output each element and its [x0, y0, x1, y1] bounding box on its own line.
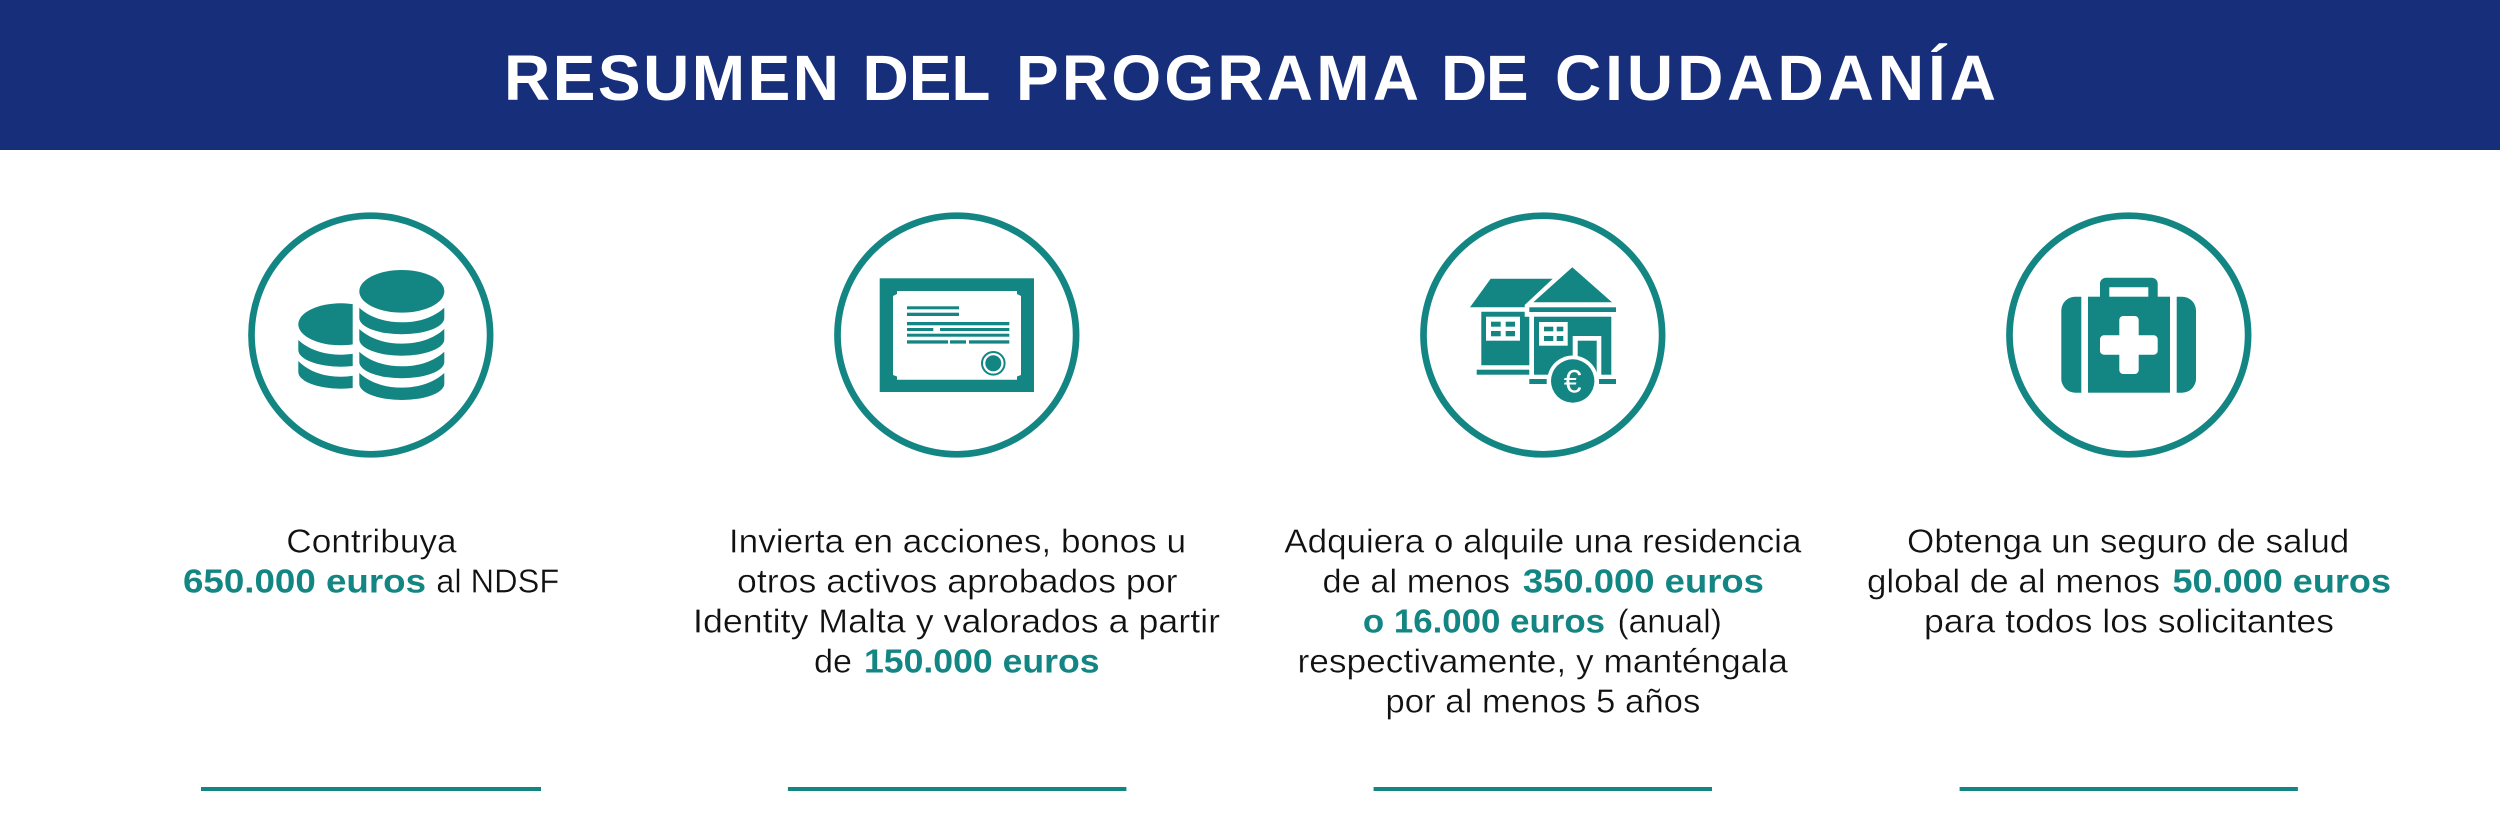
text: health insurance: global de al menos	[1867, 562, 2160, 599]
text: contribution	[183, 522, 559, 599]
panel: contribution	[183, 216, 559, 791]
icon: houses with euro coin	[1424, 216, 1662, 454]
text: health insurance	[1867, 522, 2391, 639]
text: investment: Invierta en acciones, bonos u	[729, 522, 1186, 559]
rule	[1374, 787, 1712, 791]
text: investment: Identity Malta y valorados a partir	[693, 602, 1220, 639]
text: residence	[1284, 522, 1802, 719]
text: residence: o 16.000 euros	[1363, 602, 1605, 639]
icon: houses with euro coin: €	[1564, 364, 1582, 400]
text: contribution: al NDSF	[436, 562, 559, 599]
title: DE	[1441, 42, 1528, 114]
title: PROGRAMA	[1016, 42, 1419, 114]
text: residence: (anual)	[1618, 602, 1722, 639]
text: residence: Adquiera o alquile una residencia	[1284, 522, 1802, 559]
text: residence: por al menos 5 años	[1385, 682, 1700, 719]
title	[504, 42, 1996, 114]
text: contribution: Contribuya	[286, 522, 457, 559]
panel: residence	[1284, 216, 1802, 791]
text: investment: de	[814, 642, 852, 679]
title: CIUDADANÍA	[1555, 42, 1996, 114]
text: health insurance: para todos los solicitantes	[1924, 602, 2334, 639]
title: RESUMEN	[504, 42, 839, 114]
text: health insurance: 50.000 euros	[2172, 562, 2391, 599]
rule	[1960, 787, 2298, 791]
icon: coins	[251, 216, 490, 454]
panel: health insurance	[1867, 216, 2391, 791]
text: residence: respectivamente, y manténgala	[1298, 642, 1789, 679]
text: health insurance: Obtenga un seguro de salud	[1907, 522, 2349, 559]
rule	[788, 787, 1126, 791]
text: investment: otros activos aprobados por	[737, 562, 1178, 599]
header banner	[0, 0, 2500, 150]
text: residence: de al menos	[1322, 562, 1510, 599]
icon: medical case	[2010, 216, 2248, 454]
text: investment	[693, 522, 1220, 679]
text: residence: 350.000 euros	[1523, 562, 1764, 599]
icon: certificate	[838, 216, 1076, 454]
rule	[201, 787, 541, 791]
text: contribution: 650.000 euros	[183, 562, 426, 599]
panel: investment	[693, 216, 1220, 791]
title: DEL	[862, 42, 990, 114]
text: investment: 150.000 euros	[864, 642, 1100, 679]
